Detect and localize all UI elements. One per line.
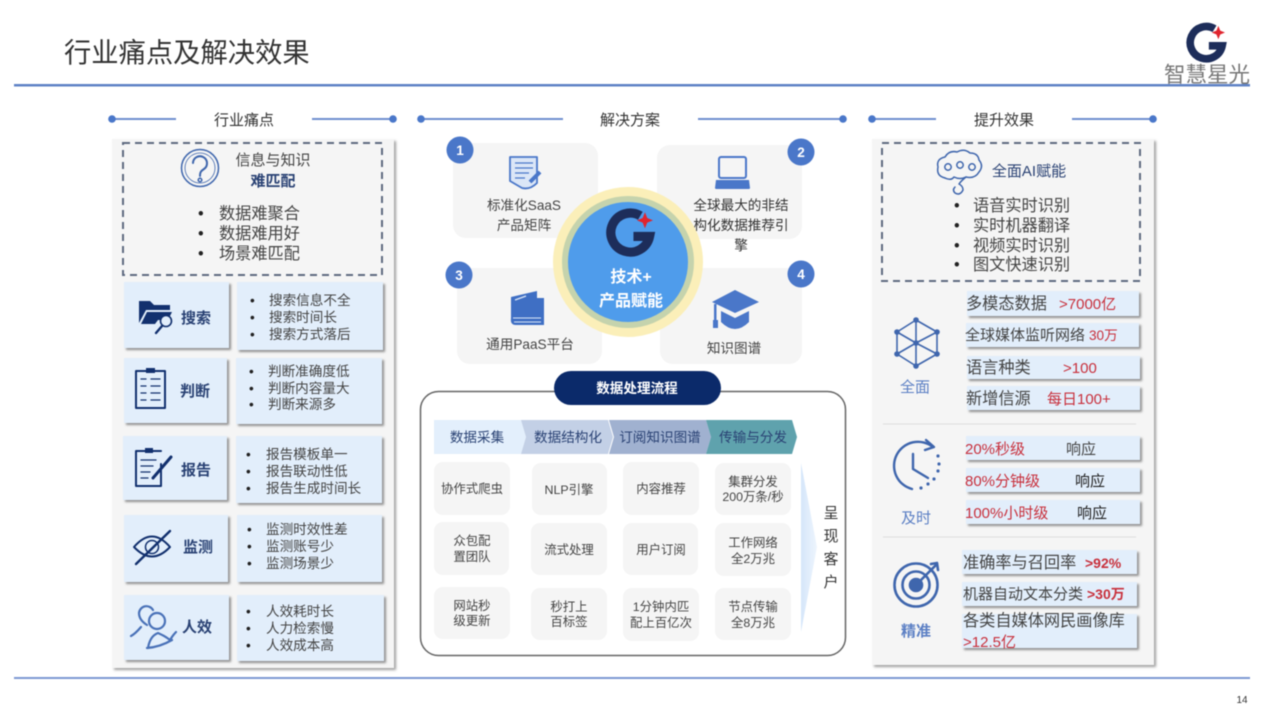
metric xyxy=(962,582,1137,606)
list: • xyxy=(246,621,251,636)
process step 1 xyxy=(434,420,526,454)
list: • xyxy=(249,364,254,379)
list: • xyxy=(246,638,251,653)
callout list: • xyxy=(954,237,960,255)
cell: 流式处理 xyxy=(544,543,594,557)
callout list: • xyxy=(954,217,960,235)
logo name: 智慧星光 xyxy=(1164,63,1250,87)
callout heading: 全面AI赋能 xyxy=(992,162,1066,180)
cell xyxy=(434,522,509,575)
list: 报告模板单一 xyxy=(266,447,348,462)
callout list: • xyxy=(198,245,204,263)
list: 监测时效性差 xyxy=(266,522,348,537)
list: • xyxy=(246,464,251,479)
metric: 语言种类 xyxy=(966,359,1031,377)
icon: folder search xyxy=(139,301,172,333)
callout list: 场景难匹配 xyxy=(219,245,300,263)
section header: 提升效果: 提升效果 xyxy=(974,112,1034,129)
list: • xyxy=(247,522,252,537)
icon: eye slash xyxy=(134,531,170,564)
cell: 众包配 xyxy=(453,534,491,548)
center text: 产品赋能 xyxy=(599,291,663,310)
metric: 响应 xyxy=(1077,504,1107,522)
metric xyxy=(962,612,1137,651)
cell xyxy=(623,523,698,575)
label: 报告 xyxy=(181,461,211,479)
icon: question xyxy=(182,150,218,186)
metric: 100%小时级 xyxy=(965,505,1048,522)
label: 精准 xyxy=(901,622,931,640)
badge 3: 3 xyxy=(455,268,463,283)
title: 行业痛点及解决效果 xyxy=(64,37,310,68)
arrow to customers xyxy=(801,463,817,632)
panel: 提升效果 xyxy=(872,139,1154,665)
process step 3: 订阅知识图谱 xyxy=(619,429,701,445)
group: 精准 xyxy=(894,550,1137,651)
section header: 行业痛点 xyxy=(108,112,397,129)
label: 全面 xyxy=(900,378,930,396)
badge 2 xyxy=(788,138,814,166)
card text: 知识图谱 xyxy=(707,340,762,356)
panel: 行业痛点 xyxy=(112,139,394,668)
bottom rule xyxy=(14,677,1250,679)
cell: 集群分发 xyxy=(728,474,778,489)
metric: 准确率与召回率 xyxy=(963,554,1076,572)
row: 搜索 xyxy=(124,282,383,350)
callout: 全面AI赋能 xyxy=(882,143,1140,281)
cell: 置团队 xyxy=(453,549,491,564)
process step 1: 数据采集 xyxy=(450,430,505,445)
metric: 全球媒体监听网络 xyxy=(965,326,1085,344)
callout: 信息与知识难匹配 xyxy=(123,143,382,275)
cell: 配上百亿次 xyxy=(630,615,692,630)
icon: target xyxy=(894,563,938,606)
card text: 产品矩阵 xyxy=(497,218,552,233)
section header: 行业痛点: 行业痛点 xyxy=(214,112,274,129)
section header: 解决方案: 解决方案 xyxy=(600,111,660,129)
list: 报告联动性低 xyxy=(266,464,348,479)
callout list: 视频实时识别 xyxy=(973,237,1070,255)
row: 判断 xyxy=(124,358,382,424)
list: • xyxy=(250,310,255,325)
metric xyxy=(966,356,1140,379)
list: 人效耗时长 xyxy=(266,604,334,619)
callout list: 图文快速识别 xyxy=(973,256,1070,274)
cell xyxy=(532,463,607,515)
metric: 80%分钟级 xyxy=(965,473,1040,490)
cell: 级更新 xyxy=(453,613,491,628)
label: 监测 xyxy=(183,539,213,556)
center circle: 技术+产品赋能 xyxy=(553,187,703,337)
pill heading xyxy=(554,371,721,405)
list: 搜索时间长 xyxy=(269,310,337,325)
callout list: 实时机器翻译 xyxy=(973,217,1070,235)
callout list: • xyxy=(954,197,960,215)
metric: 各类自媒体网民画像库 xyxy=(963,612,1125,630)
icon: people xyxy=(131,606,176,648)
list: 判断内容量大 xyxy=(268,380,350,396)
cell: 工作网络 xyxy=(728,535,778,550)
cell: 内容推荐 xyxy=(636,481,686,496)
callout list: 数据难聚合 xyxy=(219,205,300,223)
metric: >12.5亿 xyxy=(963,634,1016,651)
metric: 每日100+ xyxy=(1047,391,1111,408)
company logo xyxy=(1164,26,1250,87)
icon: network cube xyxy=(894,317,940,369)
row: 报告 xyxy=(123,436,382,503)
badge 1: 1 xyxy=(456,143,464,158)
logo mark xyxy=(1190,26,1225,59)
cell: 1分钟内匹 xyxy=(633,599,689,614)
cell: NLP引擎 xyxy=(545,482,593,497)
metric: >92% xyxy=(1085,555,1122,571)
process step 2 xyxy=(521,420,613,454)
vertical label: 呈现客户: 户 xyxy=(823,574,839,591)
metric: 30万 xyxy=(1089,328,1118,343)
vertical label: 呈现客户: 呈 xyxy=(823,505,839,522)
metric: >30万 xyxy=(1087,586,1125,602)
list: • xyxy=(250,293,255,308)
metric: >7000亿 xyxy=(1059,296,1116,313)
cell: 百标签 xyxy=(550,614,588,629)
icon: clock xyxy=(894,440,939,489)
metric: 机器自动文本分类 xyxy=(963,586,1083,603)
cell xyxy=(715,463,791,515)
cell xyxy=(531,588,607,640)
cell: 全8万兆 xyxy=(731,615,775,630)
solution card 1: 标准化SaaS xyxy=(453,143,598,238)
cell xyxy=(531,523,607,575)
cell xyxy=(434,462,510,515)
metric: 20%秒级 xyxy=(965,441,1025,458)
group: 全面 xyxy=(894,291,1140,410)
list: 监测场景少 xyxy=(266,556,334,571)
badge 1 xyxy=(446,136,474,164)
list: 判断来源多 xyxy=(268,396,336,412)
vertical label: 呈现客户: 客 xyxy=(823,551,839,568)
callout list: 语音实时识别 xyxy=(973,197,1070,215)
cell xyxy=(715,588,791,640)
solution card 2: 非结构化数据 xyxy=(657,145,802,253)
top rule xyxy=(14,84,1250,86)
metric: 新增信源 xyxy=(966,390,1031,408)
badge 2: 2 xyxy=(797,145,805,160)
list: • xyxy=(250,327,255,342)
cell: 协作式爬虫 xyxy=(441,481,503,496)
logo mark xyxy=(611,212,653,252)
panel: 数据处理流程 xyxy=(420,371,846,656)
list: • xyxy=(249,381,254,396)
solution card 4: 知识图谱 xyxy=(660,268,802,364)
page number: 14 xyxy=(1236,695,1248,706)
process step 3 xyxy=(609,420,711,454)
solution card 3: 通用PaaS平台 xyxy=(457,268,602,364)
row: 监测 xyxy=(124,515,382,582)
icon: checklist xyxy=(136,368,165,408)
label: 人效 xyxy=(182,618,212,636)
label: 判断 xyxy=(180,382,210,400)
row: 人效 xyxy=(124,595,384,661)
list: • xyxy=(247,539,252,554)
badge 4 xyxy=(788,260,814,288)
list: 报告生成时间长 xyxy=(266,481,362,496)
metric xyxy=(965,500,1140,524)
pill heading: 数据处理流程 xyxy=(596,380,678,396)
metric xyxy=(965,436,1140,460)
metric xyxy=(962,550,1137,574)
divider xyxy=(883,423,1136,425)
icon: laptop xyxy=(715,157,750,189)
cell: 秒打上 xyxy=(550,600,588,614)
process step 4 xyxy=(706,420,797,454)
list: 人效成本高 xyxy=(266,637,334,653)
list: • xyxy=(246,447,251,462)
card text: 构化数据推荐引 xyxy=(693,218,789,233)
icon: graduation cap xyxy=(712,290,759,329)
metric: 响应 xyxy=(1075,472,1105,490)
icon: report xyxy=(136,448,171,486)
cell xyxy=(715,523,791,576)
list: 搜索信息不全 xyxy=(269,292,351,308)
cell: 全2万兆 xyxy=(731,551,775,566)
section header: 解决方案 xyxy=(417,111,847,129)
list: • xyxy=(246,481,251,496)
list: • xyxy=(249,397,254,412)
icon: brain xyxy=(938,150,982,194)
section header: 提升效果 xyxy=(868,112,1157,129)
cell xyxy=(623,588,699,641)
metric: 响应 xyxy=(1066,440,1096,458)
metric xyxy=(965,323,1139,347)
label: 及时 xyxy=(901,510,931,527)
callout list: • xyxy=(198,205,204,223)
cell: 节点传输 xyxy=(728,599,778,614)
group: 及时 xyxy=(894,436,1140,527)
list: 监测账号少 xyxy=(266,539,334,554)
card text: 擎 xyxy=(734,238,748,253)
icon: book xyxy=(511,291,544,325)
cell: 200万条/秒 xyxy=(722,490,784,504)
center text: 技术+ xyxy=(610,267,652,286)
list: 搜索方式落后 xyxy=(269,327,351,342)
card text: 标准化SaaS xyxy=(487,198,561,213)
metric: >100 xyxy=(1063,360,1097,377)
icon: document xyxy=(510,157,540,188)
callout heading: 难匹配 xyxy=(250,173,296,190)
metric xyxy=(966,386,1140,410)
list: 判断准确度低 xyxy=(268,364,350,379)
cell: 用户订阅 xyxy=(636,542,686,557)
cell: 网站秒 xyxy=(453,599,491,613)
cell xyxy=(623,462,699,515)
process step 2: 数据结构化 xyxy=(534,430,602,445)
list: • xyxy=(246,604,251,619)
vertical label: 呈现客户: 现 xyxy=(823,528,839,545)
metric xyxy=(965,468,1140,492)
metric: 多模态数据 xyxy=(966,295,1047,313)
card text: 全球最大的非结 xyxy=(693,197,789,213)
list: 人力检索慢 xyxy=(266,620,334,636)
list: • xyxy=(247,556,252,571)
callout list: 数据难用好 xyxy=(219,225,300,243)
badge 4: 4 xyxy=(797,267,805,282)
cell xyxy=(434,587,510,639)
divider xyxy=(883,536,1136,538)
card text: 通用PaaS平台 xyxy=(486,337,574,352)
callout heading: 信息与知识 xyxy=(235,152,311,169)
callout list: • xyxy=(198,225,204,243)
metric xyxy=(966,291,1139,316)
badge 3 xyxy=(446,262,472,288)
callout list: • xyxy=(954,256,960,274)
label: 搜索 xyxy=(181,309,211,327)
process step 4: 传输与分发 xyxy=(719,430,787,445)
